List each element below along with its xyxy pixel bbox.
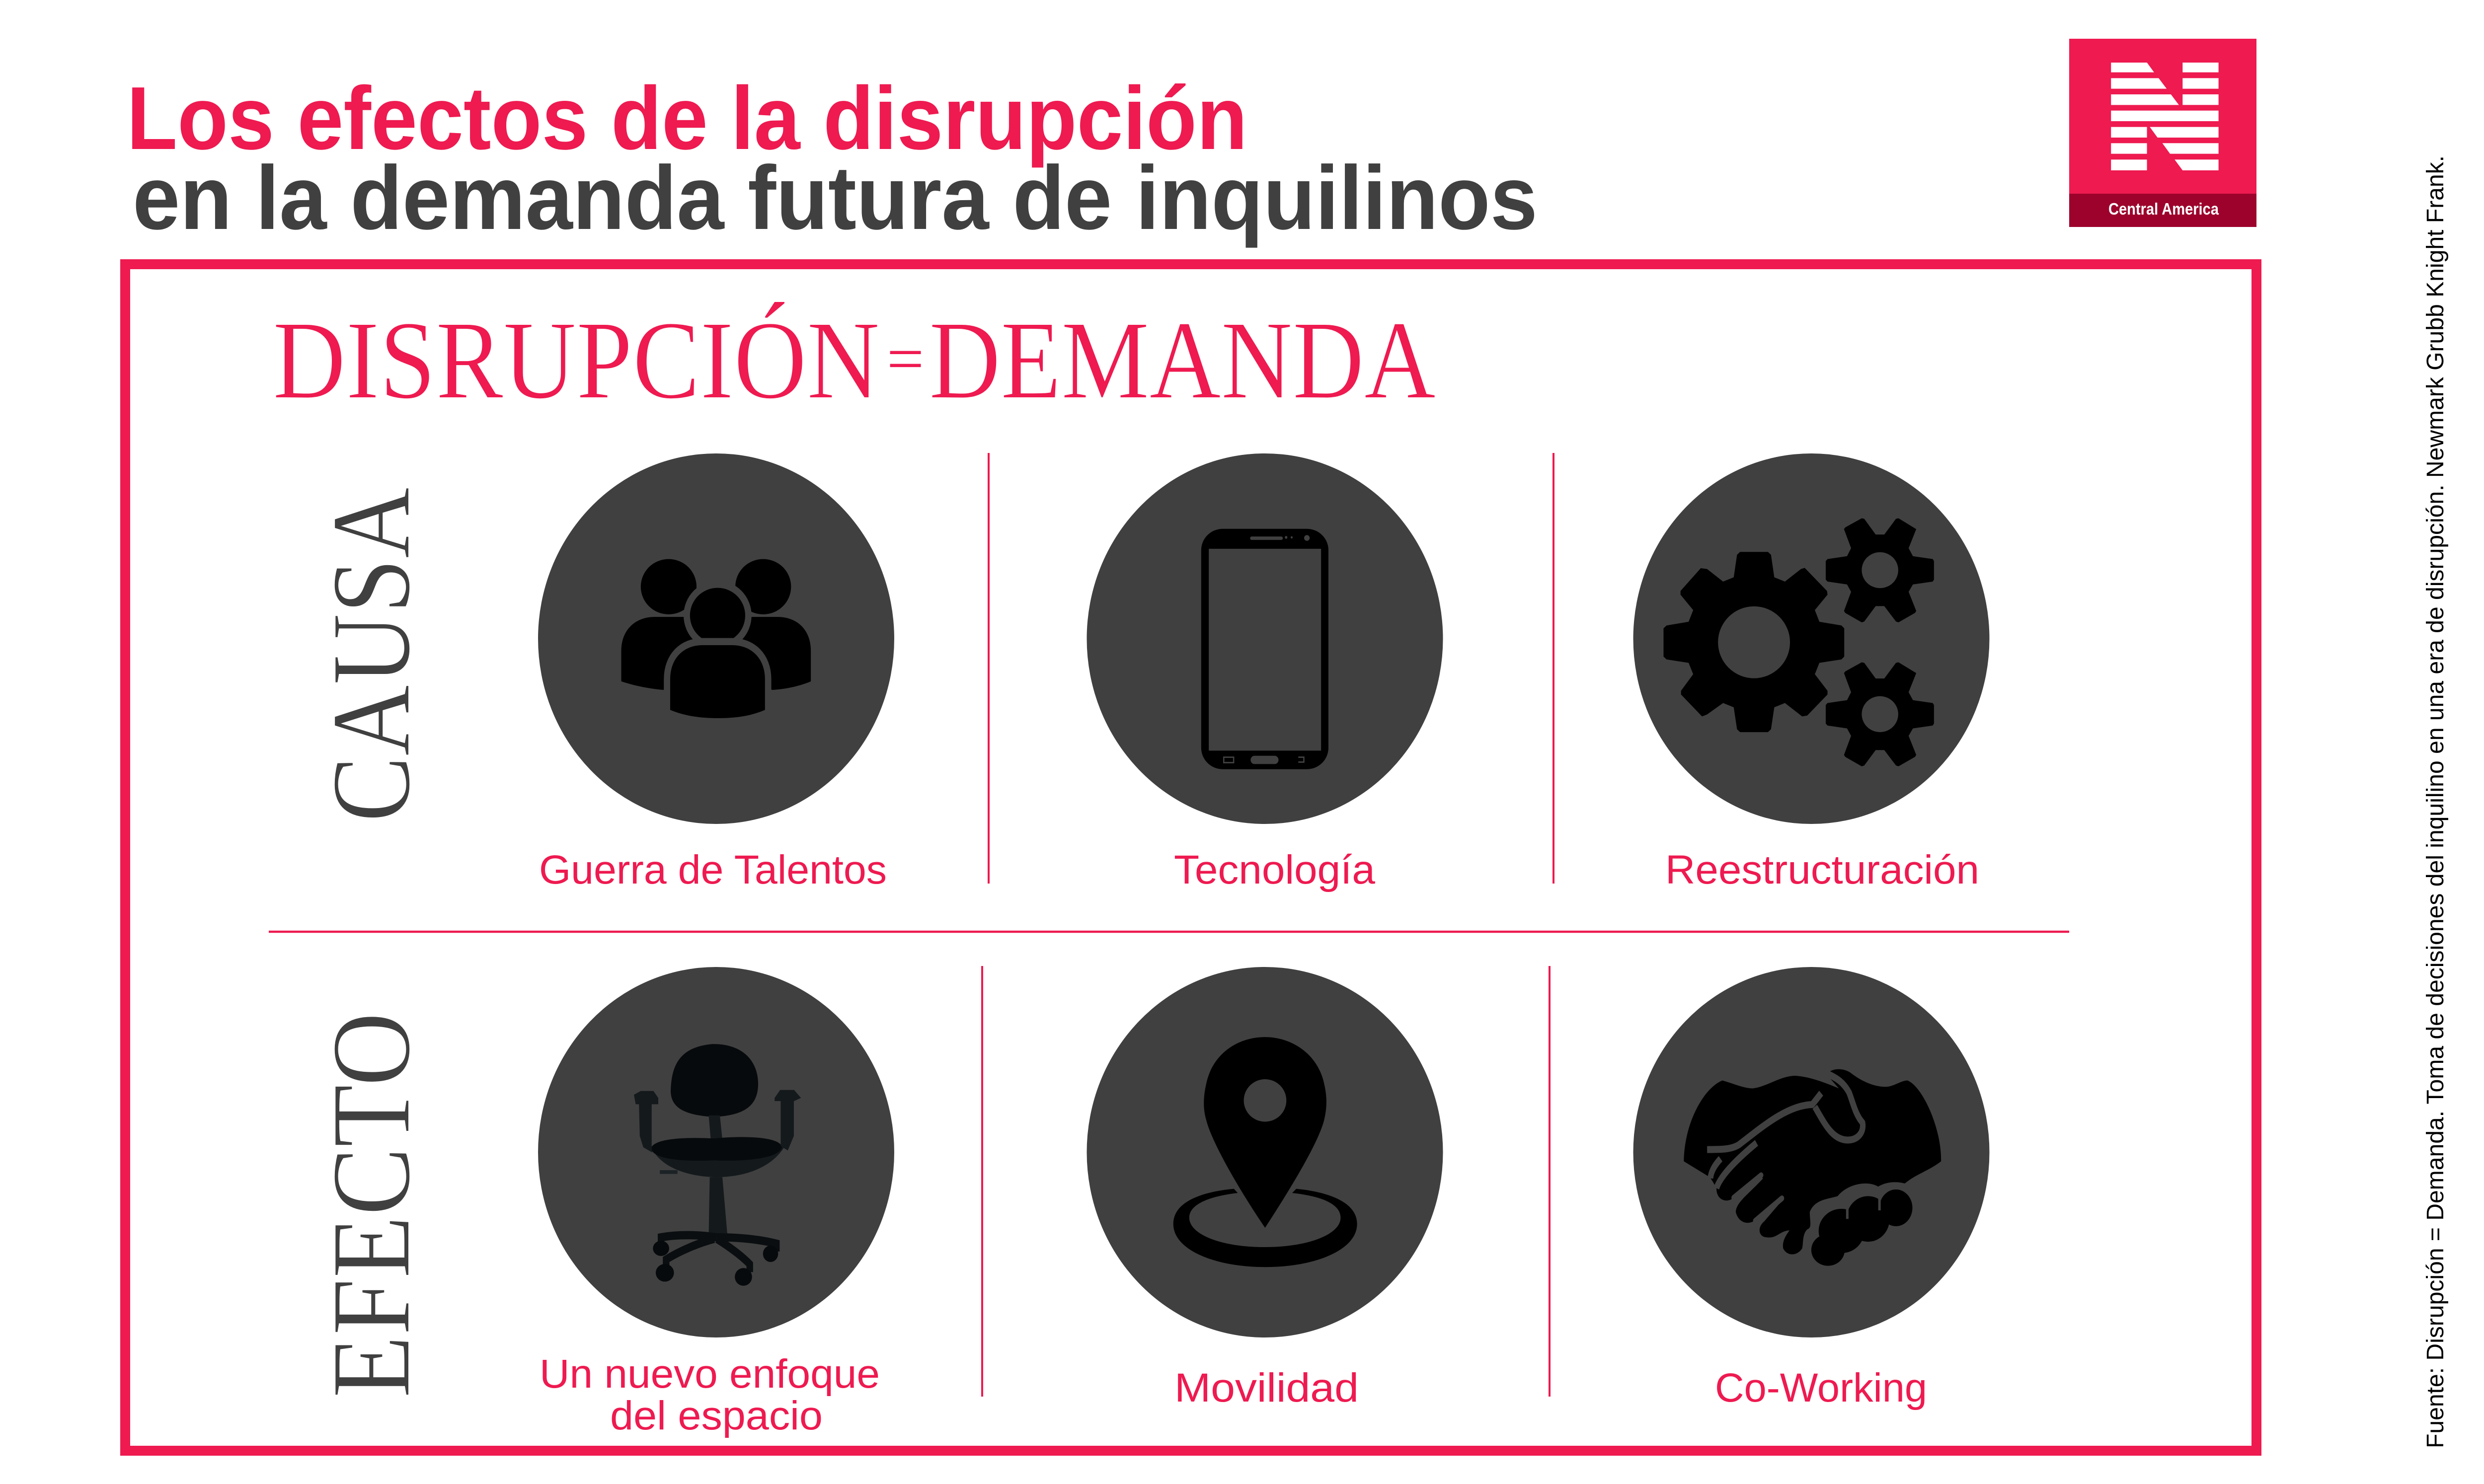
item: tecnología <box>1087 453 1443 824</box>
label: reestructuración: Reestructuración <box>1665 847 1979 892</box>
icon: smartphone <box>1201 529 1328 769</box>
source note: Fuente: Disrupción = Demanda. Toma de decisiones del inquilino en una era de disrupción. Newmark Grubb Knight Frank. <box>2422 155 2449 1448</box>
label: co-working: Co-Working <box>1715 1365 1927 1410</box>
icon: map pin <box>1173 1037 1357 1267</box>
row label: efecto: EFECTO <box>309 1012 434 1398</box>
item: movilidad <box>1087 967 1443 1337</box>
item: guerra de talentos <box>538 453 894 824</box>
title: Los efectos de la disrupción <box>127 69 1247 168</box>
label: movilidad: Movilidad <box>1174 1365 1359 1410</box>
title <box>127 69 1538 248</box>
heading: disrupción = demanda <box>273 298 1436 422</box>
item: reestructuración <box>1633 453 1989 824</box>
label: un nuevo enfoque del espacio: Un nuevo enfoque <box>540 1351 880 1397</box>
logo: Newmark Central America: Central America <box>2108 200 2219 218</box>
icon: office chair <box>634 1044 801 1286</box>
label: guerra de talentos: Guerra de Talentos <box>539 847 887 892</box>
icon: handshake <box>1684 1069 1941 1266</box>
icon: gears <box>1663 519 1934 766</box>
item: un nuevo enfoque del espacio <box>538 967 894 1337</box>
label: tecnología: Tecnología <box>1174 847 1375 892</box>
row label: causa: CAUSA <box>309 487 434 822</box>
logo: Newmark Central America <box>2069 39 2256 227</box>
panel: main frame <box>125 264 2256 1451</box>
label: un nuevo enfoque del espacio: del espacio <box>610 1393 823 1438</box>
heading: disrupción = demanda: DISRUPCIÓN <box>273 298 880 422</box>
title: en la demanda futura de inquilinos <box>133 147 1538 248</box>
label: un nuevo enfoque del espacio <box>540 1351 880 1438</box>
heading: disrupción = demanda: DEMANDA <box>929 298 1436 422</box>
heading: disrupción = demanda: = <box>887 323 924 395</box>
icon: people <box>621 559 811 718</box>
item: co-working <box>1633 967 1989 1337</box>
